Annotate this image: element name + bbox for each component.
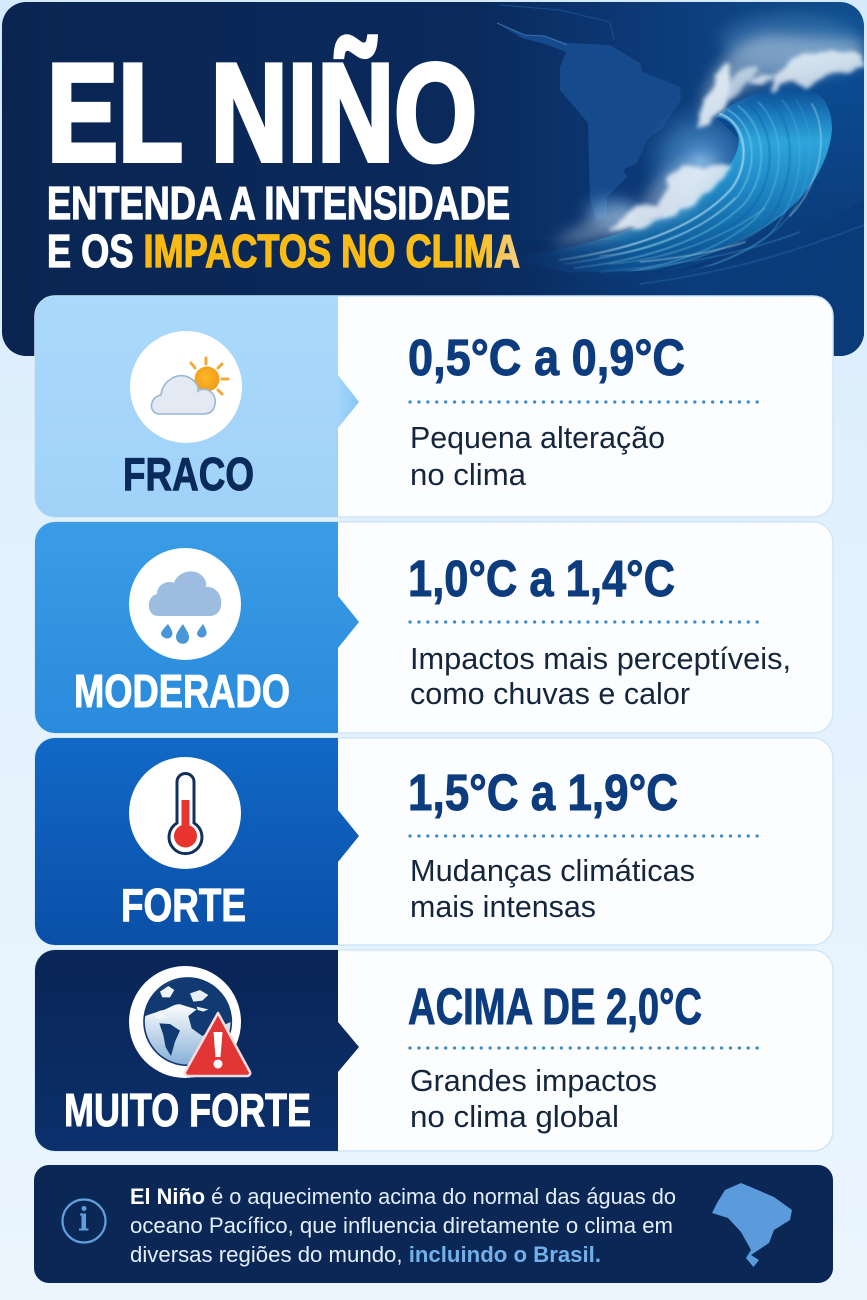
temperature: forte: 1,5°C a 1,9°C [408,764,678,821]
level panel: forte [35,738,359,945]
description: muito forte: no clima global [410,1099,619,1134]
icon: globe with warning [144,978,250,1076]
label: forte: FORTE [121,879,246,931]
footer text: El Niño é o aquecimento acima do normal das águas do [130,1184,681,1209]
subtitle line two: E OS IMPACTOS NO CLIMA [47,225,520,277]
temperature: fraco: 0,5°C a 0,9°C [408,329,685,386]
description: forte: mais intensas [410,889,596,924]
icon: info [62,1200,106,1242]
icon: rain cloud [149,571,221,644]
description: forte: Mudanças climáticas [410,853,695,888]
footer text: diversas regiões do mundo, incluindo o Brasil. [130,1242,599,1267]
row: forte [35,738,833,945]
level panel: moderado [35,522,359,733]
row: fraco [35,296,833,517]
title: EL NIÑO [47,36,477,190]
row: moderado [35,522,833,733]
footer note [34,1165,833,1283]
mist on the right sky [720,14,860,66]
description: moderado: como chuvas e calor [410,676,690,711]
map of South America [497,5,681,226]
illustration: map and wave [497,5,864,360]
icon: sun and cloud [151,358,228,414]
footer text: oceano Pacífico, que influencia diretamente o clima em [130,1213,673,1238]
description: fraco: no clima [410,457,527,492]
glow behind the wave [647,108,739,192]
label: fraco: FRACO [123,448,254,500]
icon: thermometer [169,774,202,854]
subtitle line one: ENTENDA A INTENSIDADE [47,177,510,229]
label: moderado: MODERADO [74,665,290,717]
icon: map of Brazil [712,1183,792,1267]
temperature: muito forte: ACIMA DE 2,0°C [408,978,702,1035]
level panel: muito forte [35,950,359,1151]
wave [551,84,864,356]
warning triangle [185,1013,250,1076]
description: moderado: Impactos mais perceptíveis, [410,641,791,676]
header banner [2,2,864,360]
description: fraco: Pequena alteração [410,420,665,455]
tail fade into the dark sea [520,240,628,272]
foam on the crest [550,34,864,245]
row: muito forte [35,950,833,1151]
level panel: fraco [35,296,359,517]
description: muito forte: Grandes impactos [410,1063,657,1098]
temperature: moderado: 1,0°C a 1,4°C [408,550,675,607]
label: muito forte: MUITO FORTE [64,1084,311,1136]
